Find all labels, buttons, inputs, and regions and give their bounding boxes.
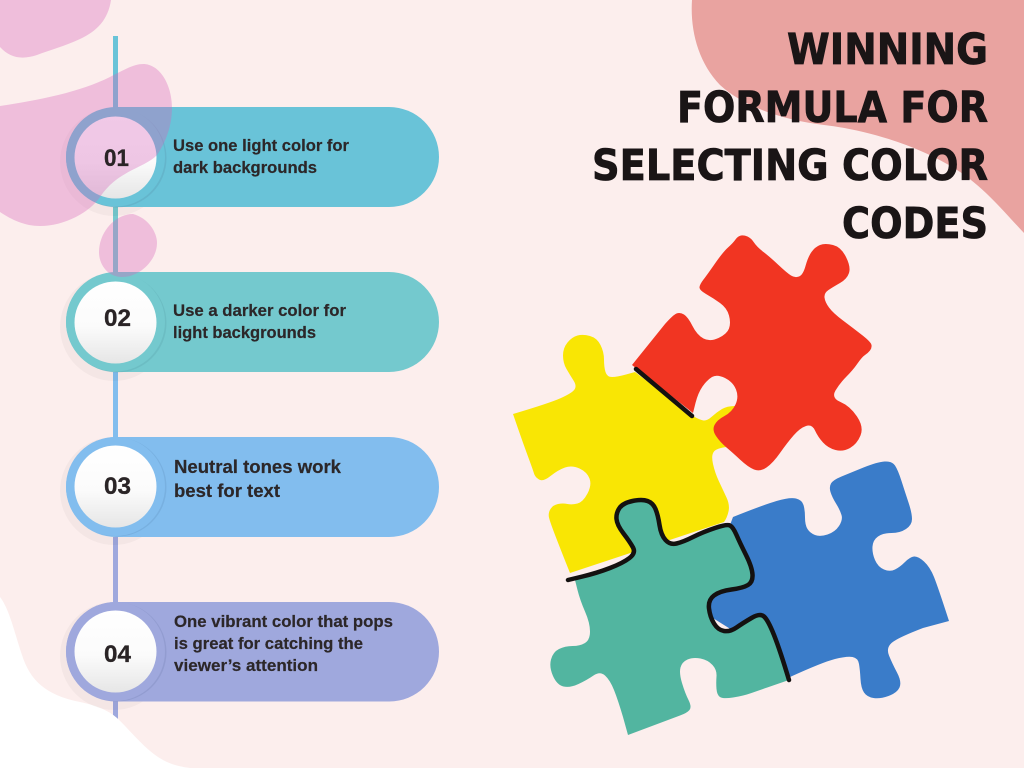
- number 01: 01: [104, 145, 129, 172]
- puzzle piece: green: [550, 500, 789, 735]
- badge 03: 03: [104, 473, 131, 500]
- puzzle piece: red: [632, 235, 872, 470]
- white corner blob: [0, 597, 190, 768]
- puzzle piece: blue: [700, 461, 949, 698]
- badge 02: [66, 272, 166, 372]
- pill 03: [66, 437, 439, 537]
- badge 04: [66, 602, 166, 702]
- badge shadow 01: [60, 108, 168, 216]
- title: SELECTING COLOR: [592, 141, 988, 191]
- badge 03: [66, 437, 166, 536]
- pink blob small: [99, 214, 157, 277]
- pink blob middle left: [0, 64, 172, 226]
- title: CODES: [842, 199, 988, 249]
- step 04: [60, 602, 439, 710]
- text 02: Use a darker color for: [173, 302, 347, 320]
- step 01: [60, 107, 439, 216]
- text 02: light backgrounds: [173, 324, 316, 342]
- badge 04: 04: [104, 641, 132, 668]
- text 04: One vibrant color that pops: [174, 613, 393, 631]
- puzzle outline: green seam: [568, 500, 789, 680]
- pill 04: [66, 602, 439, 702]
- text 03: [174, 457, 342, 501]
- badge shadow 04: [60, 602, 168, 710]
- badge 01: [66, 108, 166, 208]
- text 01: [173, 137, 350, 177]
- title: FORMULA FOR: [677, 83, 988, 133]
- timeline line: [113, 36, 118, 721]
- step 02: [60, 272, 439, 381]
- text 04: viewer’s attention: [174, 657, 318, 675]
- text 01: Use one light color for: [173, 137, 350, 155]
- puzzle piece: yellow: [513, 335, 735, 573]
- puzzle outline: red and yellow seam: [636, 369, 692, 416]
- title: WINNING: [787, 25, 988, 75]
- step 03: [60, 437, 439, 545]
- badge shadow 02: [60, 273, 168, 381]
- text 02: [173, 302, 347, 342]
- puzzle illustration: [513, 235, 949, 735]
- pill 01: [66, 107, 439, 207]
- text 03: best for text: [174, 481, 280, 501]
- text 03: Neutral tones work: [174, 457, 342, 477]
- title: [592, 25, 988, 249]
- number 02: 02: [104, 305, 131, 332]
- pill 02: [66, 272, 439, 372]
- text 04: is great for catching the: [174, 635, 363, 653]
- text 01: dark backgrounds: [173, 159, 317, 177]
- pink blob top left: [0, 0, 111, 58]
- salmon corner blob: [692, 0, 1024, 233]
- badge shadow 03: [60, 437, 168, 545]
- text 04: [174, 613, 393, 675]
